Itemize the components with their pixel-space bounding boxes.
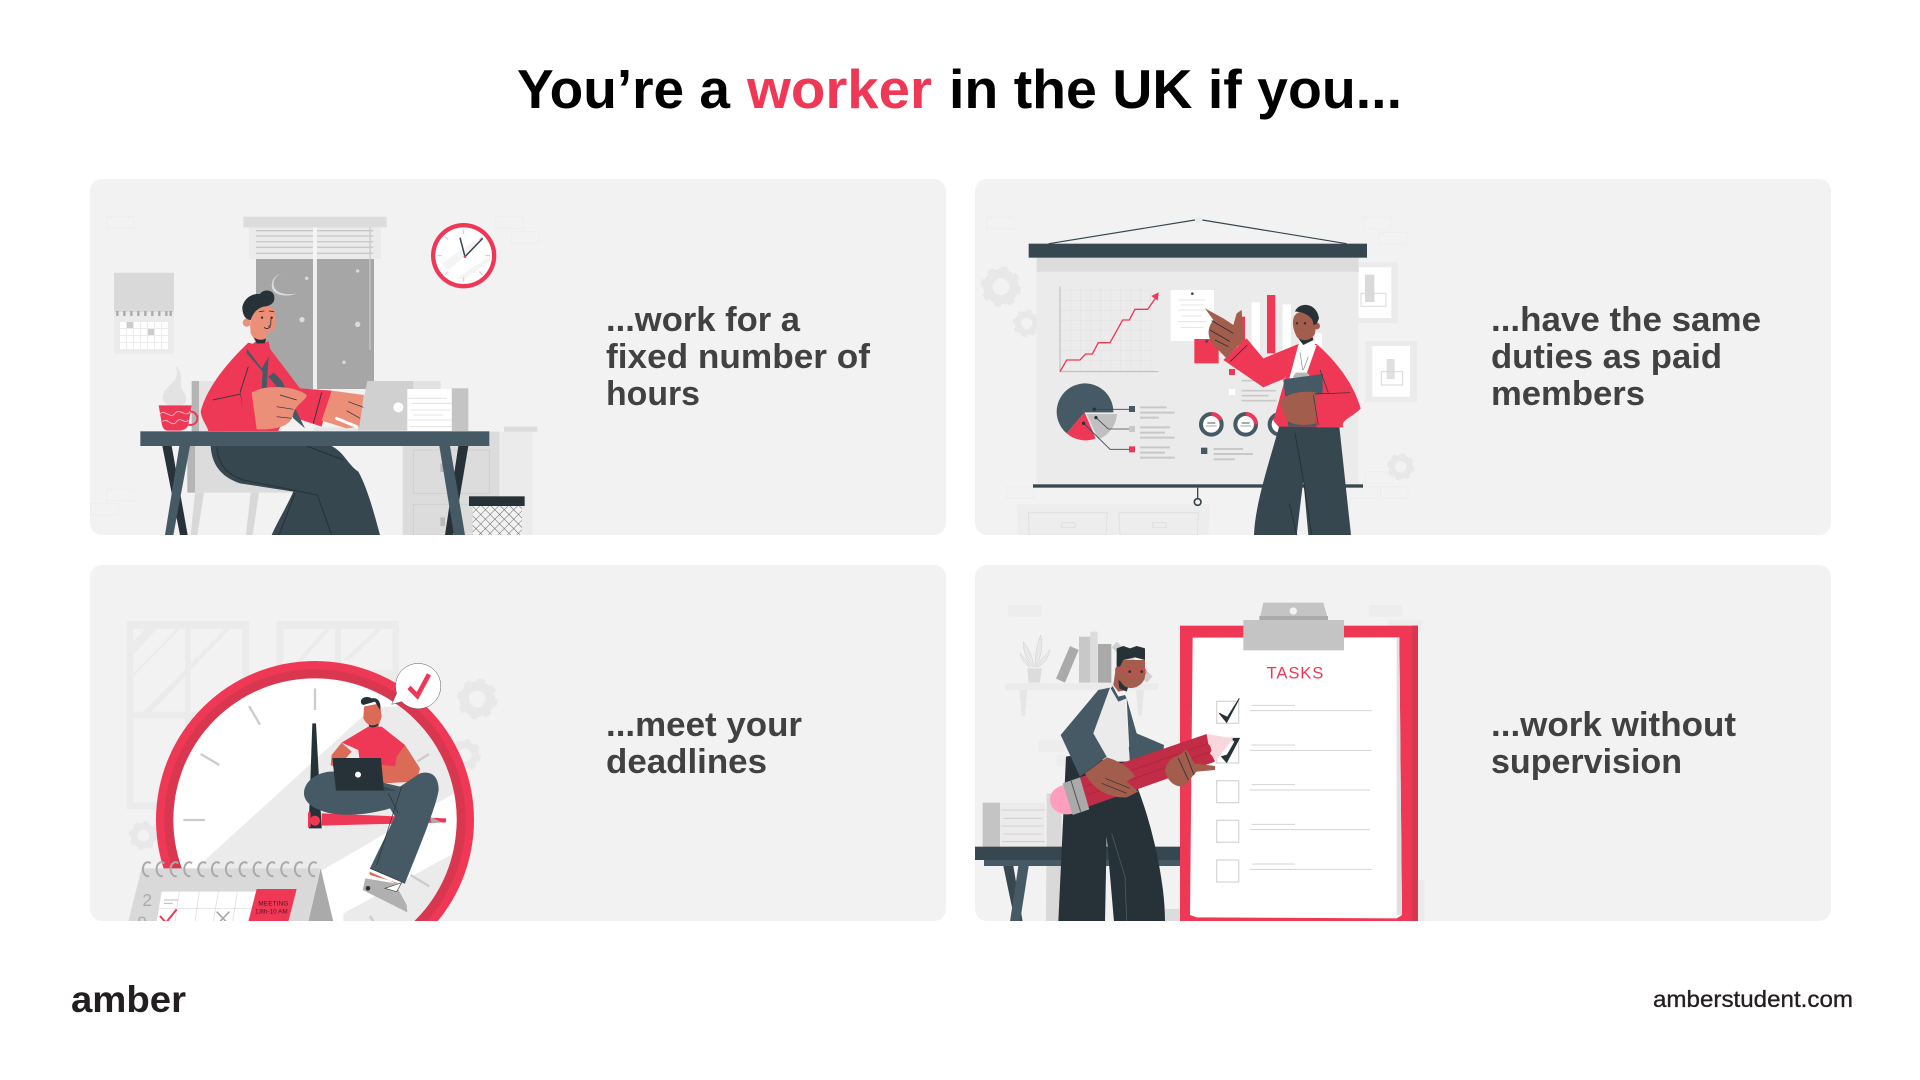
text: deadlines xyxy=(606,706,802,781)
background windows and gears xyxy=(127,621,495,848)
text: same duties: members xyxy=(1491,375,1645,413)
panel: meet deadlines xyxy=(90,565,946,921)
note cards and bar chart xyxy=(1171,290,1322,401)
logo: amber: amber xyxy=(71,979,186,1020)
icon: waste basket xyxy=(469,496,525,535)
background gears xyxy=(983,269,1413,479)
illustration: man presenting charts xyxy=(983,217,1417,535)
pie chart with legend xyxy=(1057,383,1175,458)
text: same duties xyxy=(1491,301,1761,413)
illustration: man working at desk at night xyxy=(91,217,539,535)
text: fixed hours xyxy=(606,301,871,413)
illustration: man with pencil and task list xyxy=(975,603,1425,922)
desk calendar: 9 xyxy=(137,912,147,932)
icon: coffee cup with steam xyxy=(159,365,197,431)
speech bubble with check xyxy=(392,663,441,709)
text: fixed hours: hours xyxy=(606,375,700,413)
text: no supervision: supervision xyxy=(1491,743,1682,781)
title xyxy=(517,58,1402,120)
man holding giant pencil xyxy=(1050,646,1233,922)
title: worker xyxy=(746,58,932,120)
text: deadlines: ...meet your xyxy=(606,706,802,744)
clipboard with task list xyxy=(1180,603,1418,922)
illustration: man on clock hand xyxy=(128,661,498,921)
panel: fixed number of hours xyxy=(90,179,946,535)
text: deadlines: deadlines xyxy=(606,743,767,781)
projector screen xyxy=(1029,217,1367,505)
man in red shirt at desk xyxy=(201,290,380,535)
large clock xyxy=(156,661,474,921)
donut gauges xyxy=(1201,414,1290,459)
desk calendar: 2 xyxy=(142,890,152,910)
text: same duties: duties as paid xyxy=(1491,338,1722,376)
desk calendar: MEETING xyxy=(258,900,288,907)
desk calendar xyxy=(128,861,334,921)
clock hands xyxy=(308,723,446,828)
desk calendar: 13th-10 AM xyxy=(255,908,288,915)
wall frames xyxy=(1359,268,1410,396)
text: fixed hours: ...work for a xyxy=(606,301,801,339)
clipboard with task list: TASKS xyxy=(1267,664,1323,683)
panel: work without supervision xyxy=(975,565,1831,922)
text: no supervision: ...work without xyxy=(1491,706,1736,744)
panel: same duties as paid members xyxy=(975,179,1831,535)
text: same duties: ...have the same xyxy=(1491,301,1761,339)
presenter man xyxy=(1205,305,1361,535)
background cabinet xyxy=(1028,512,1199,535)
cabinet and chair xyxy=(187,381,537,535)
desk with paper stack xyxy=(975,794,1180,921)
icon: wall calendar xyxy=(114,273,174,354)
text: no supervision xyxy=(1491,706,1736,781)
icon: wall clock xyxy=(431,223,496,288)
man with laptop xyxy=(304,697,442,912)
title: in the UK if you... xyxy=(949,58,1402,120)
background shelf and books xyxy=(1020,632,1152,716)
laptop and paper stack xyxy=(313,381,468,431)
desk xyxy=(140,431,489,535)
title: You’re a xyxy=(517,58,730,120)
website address: amberstudent.com xyxy=(1653,986,1853,1012)
text: fixed hours: fixed number of xyxy=(606,338,871,376)
icon: window with blinds xyxy=(243,217,387,389)
line chart xyxy=(1060,287,1159,372)
